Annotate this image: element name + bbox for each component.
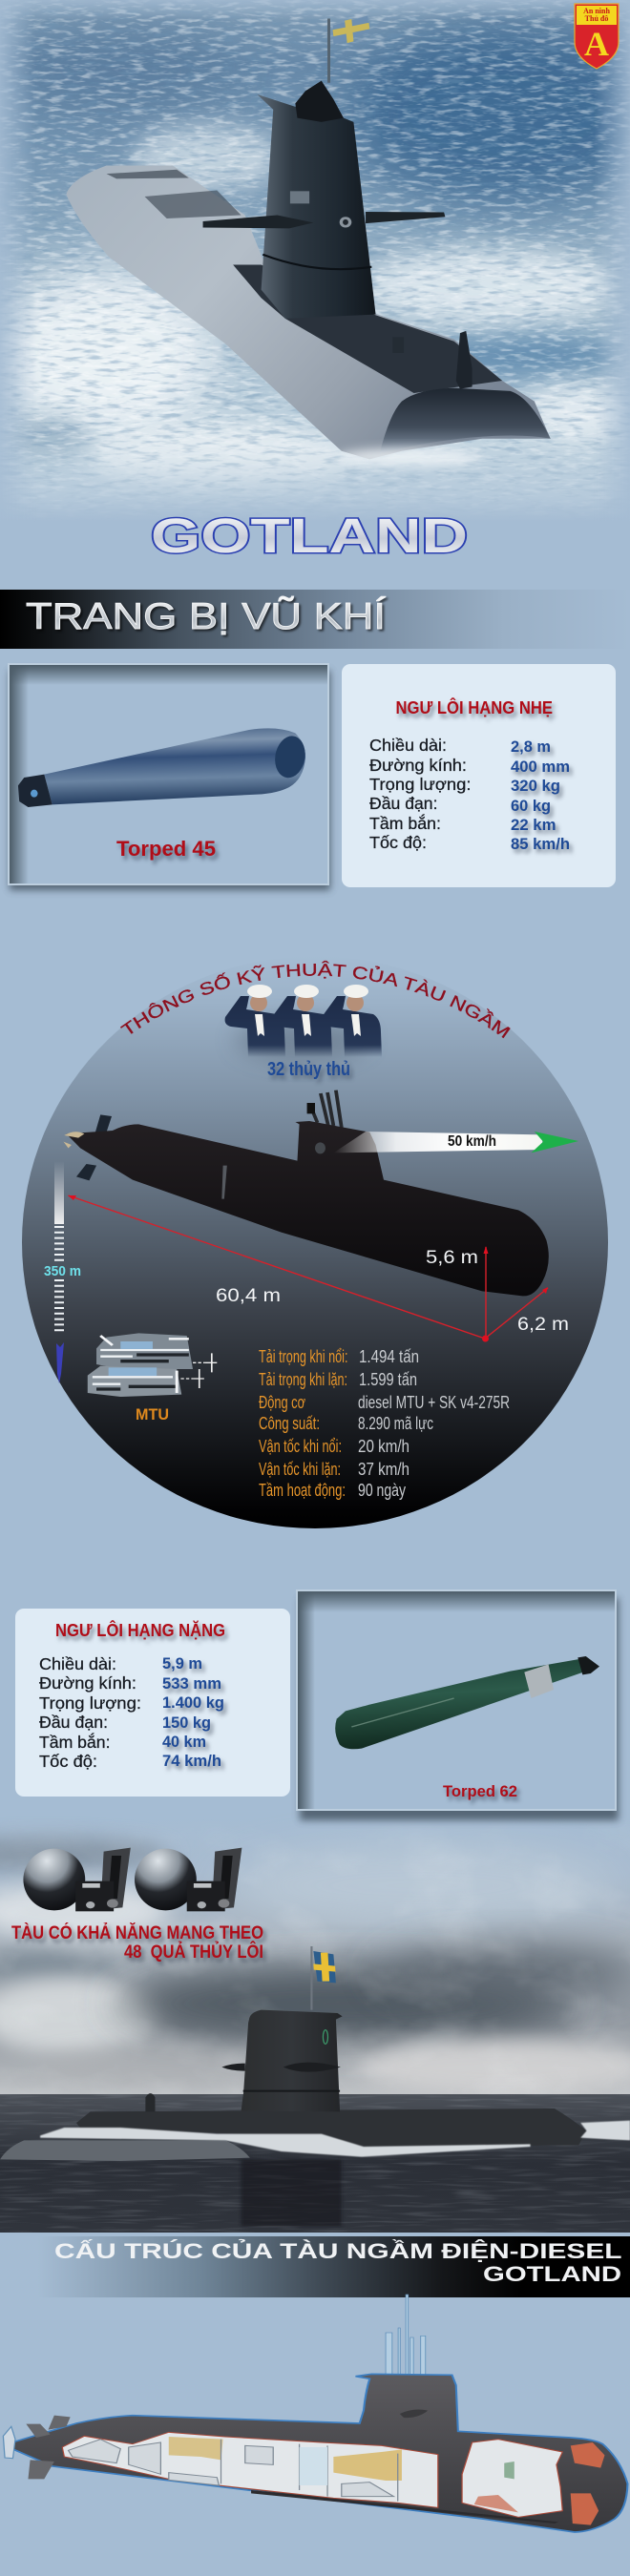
torpedo 45 illustration (18, 728, 307, 807)
interior detail lines (69, 2440, 398, 2502)
flag pole and flag (310, 1946, 336, 2010)
spec values: 90 ngày (358, 1481, 406, 1500)
sail (257, 81, 376, 319)
spec labels: Trọng lượng: (39, 1693, 141, 1713)
newspaper logo: Thủ đô (585, 14, 608, 23)
panel: heavy torpedo specs (15, 1609, 290, 1797)
curved heading: THÔNG SỐ KỸ THUẬT CỦA TÀU NGẦM (120, 960, 511, 1038)
card title: NGƯ LÔI HẠNG NẶNG (55, 1620, 225, 1640)
speed arrow (333, 1132, 578, 1153)
spec values: 2,8 m (511, 738, 551, 756)
photo: sky and sea with submarine (0, 1816, 630, 2233)
aft interior (62, 2432, 438, 2507)
yellow machinery mid (333, 2449, 402, 2481)
spec labels: Chiều dài: (39, 1654, 116, 1673)
spec labels: Tải trọng khi lặn: (259, 1370, 347, 1389)
stern fins and propeller (3, 2416, 71, 2479)
spec labels: Tốc độ: (39, 1752, 97, 1771)
torpedo 62 illustration (335, 1656, 599, 1749)
spec values: 5,9 m (162, 1655, 202, 1672)
spec labels: Trọng lượng: (369, 775, 472, 794)
icon: two naval mines (23, 1848, 242, 1911)
spec labels: Đầu đạn: (39, 1713, 108, 1732)
panel: Torped 45 image (9, 664, 330, 890)
spec labels (369, 736, 472, 852)
hull outer shell (12, 2374, 627, 2532)
flag and mast (327, 15, 369, 83)
spec values: 60 kg (511, 798, 551, 815)
yellow machinery aft (169, 2437, 223, 2460)
newspaper logo (575, 4, 619, 69)
spec values: 150 kg (162, 1714, 211, 1732)
forward interior (462, 2440, 562, 2517)
spec labels: Công suất: (259, 1414, 320, 1433)
spec values: 20 km/h (358, 1437, 410, 1456)
green equipment (504, 2462, 514, 2479)
sail detail (400, 2410, 428, 2418)
spec values (162, 1655, 224, 1770)
spec labels: Tải trọng khi nổi: (259, 1347, 347, 1366)
spec values: 1.400 kg (162, 1694, 224, 1712)
icon: MTU engines (88, 1333, 217, 1397)
title: GOTLAND: GOTLAND (151, 509, 468, 563)
water (0, 2094, 630, 2233)
spec labels: Động cơ (259, 1393, 305, 1412)
spec values: 1.599 tấn (359, 1370, 417, 1389)
depth value: 350 m (44, 1264, 81, 1279)
submarine side view (64, 1091, 549, 1296)
spec labels: Tầm bắn: (369, 813, 441, 833)
cutaway submarine (3, 2295, 627, 2532)
spec labels: Tầm bắn: (39, 1732, 111, 1752)
spec values: diesel MTU + SK v4-275R (358, 1393, 510, 1412)
spec labels: Vận tốc khi lặn: (259, 1460, 341, 1479)
spec labels: Đường kính: (39, 1673, 136, 1693)
spec values: 22 km (511, 817, 556, 834)
spec values: 320 kg (511, 778, 560, 795)
panel: light torpedo specs (342, 664, 616, 887)
spec values: 37 km/h (358, 1460, 410, 1479)
label: length: 60,4 m (216, 1286, 281, 1306)
speed label: 50 km/h (448, 1133, 496, 1150)
heading bar: structure: CẤU TRÚC CỦA TÀU NGẦM ĐIỆN-DIESEL (54, 2239, 622, 2263)
dimension lines (68, 1195, 548, 1341)
icon: three sailors (225, 985, 382, 1061)
spec values: 85 km/h (511, 836, 570, 853)
bow wave foam (40, 2121, 630, 2157)
blue-tint compartment (300, 2447, 327, 2485)
spec values: 8.290 mã lực (358, 1414, 433, 1433)
dive planes (203, 212, 445, 228)
label: beam: 6,2 m (517, 1315, 569, 1335)
spec labels: Vận tốc khi nổi: (259, 1437, 342, 1456)
spec labels: Chiều dài: (369, 736, 447, 755)
spec values: 40 km (162, 1734, 206, 1751)
hull (76, 2109, 587, 2147)
spec values: 74 km/h (162, 1753, 221, 1770)
sky (0, 1816, 630, 2096)
bow red-orange machinery (474, 2442, 604, 2525)
spec labels (259, 1347, 347, 1500)
spec values: 400 mm (511, 758, 570, 776)
newspaper logo: A (584, 25, 609, 63)
hull (66, 165, 551, 467)
spec values (358, 1347, 510, 1500)
heading bar: structure (0, 2236, 630, 2297)
spec values: 1.494 tấn (359, 1347, 419, 1366)
spec values: 533 mm (162, 1675, 221, 1693)
mines caption: TÀU CÓ KHẢ NĂNG MANG THEO (11, 1922, 263, 1943)
crew label: 32 thủy thủ (267, 1059, 350, 1080)
caption: Torped 62: Torped 62 (443, 1783, 517, 1800)
sea background (0, 0, 630, 521)
newspaper logo: An ninh (583, 7, 610, 15)
heading bar: weapons: TRANG BỊ VŨ KHÍ (26, 595, 386, 637)
spec labels: Đầu đạn: (369, 794, 437, 813)
mines caption: 48 QUẢ THỦY LÔI (124, 1942, 263, 1963)
keel strip (251, 2490, 558, 2524)
spec values (511, 738, 570, 853)
spec labels: Tốc độ: (369, 833, 427, 852)
card title: NGƯ LÔI HẠNG NHẸ (395, 697, 553, 717)
sail (145, 2010, 343, 2111)
heading bar: weapons (0, 590, 630, 649)
mines caption (11, 1922, 263, 1963)
heading bar: structure: GOTLAND (483, 2262, 621, 2286)
label: height: 5,6 m (426, 1248, 478, 1268)
spec labels (39, 1654, 141, 1771)
panel: Torped 62 image (297, 1590, 619, 1820)
label: MTU: MTU (136, 1405, 169, 1423)
depth gauge (44, 1161, 81, 1383)
hero photo: submarine at sea (0, 0, 630, 521)
caption: Torped 45: Torped 45 (116, 837, 216, 861)
masts (386, 2295, 426, 2378)
panel: technical specs circle (22, 960, 608, 1528)
spec labels: Tầm hoạt động: (259, 1481, 346, 1500)
spec labels: Đường kính: (369, 756, 467, 775)
